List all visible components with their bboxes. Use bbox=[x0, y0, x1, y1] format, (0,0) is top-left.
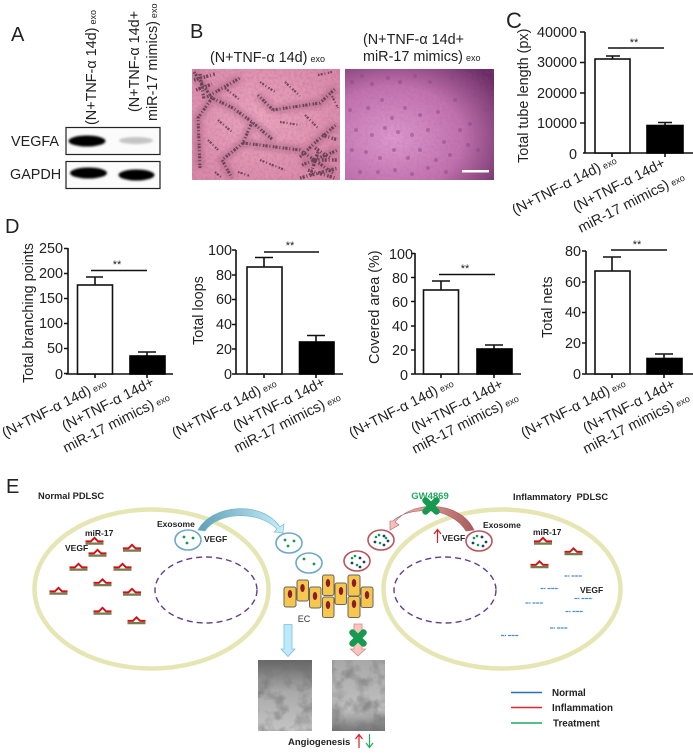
y axis bbox=[537, 25, 693, 163]
legend: Treatment bbox=[553, 718, 601, 730]
chart: total loops: miR-17 mimics)exo bbox=[232, 389, 343, 457]
normal PDLSC title: Normal PDLSC bbox=[38, 491, 104, 501]
schematic labels: VEGF bbox=[580, 585, 603, 595]
schematic labels bbox=[65, 519, 603, 595]
x labels: (N+TNF-α 14d+ bbox=[571, 155, 668, 216]
chart: total loops bbox=[170, 240, 343, 457]
chart: total nets: miR-17 mimics)exo bbox=[581, 390, 692, 458]
chart: covered area: 40 bbox=[392, 319, 408, 335]
red up arrow, angiogenesis bbox=[356, 734, 362, 748]
chart: total nets: 20 bbox=[565, 336, 581, 352]
angiogenesis micrograph left bbox=[258, 660, 312, 731]
legend bbox=[511, 688, 613, 730]
image title 2 bbox=[363, 32, 480, 65]
chart: total loops: 20 bbox=[216, 342, 232, 358]
chart: total nets: (N+TNF-α 14d)exo bbox=[519, 375, 628, 442]
chart: total branching points: Total branching points bbox=[21, 243, 37, 383]
schematic labels: Exosome bbox=[157, 519, 195, 529]
chart: covered area: (N+TNF-α 14d+ bbox=[409, 376, 506, 437]
chart: total nets: (N+TNF-α 14d+ bbox=[581, 376, 678, 437]
y axis: 20000 bbox=[537, 86, 577, 102]
chart: covered area: 60 bbox=[392, 295, 408, 311]
panel letter A: A bbox=[11, 24, 25, 46]
image title 2: miR-17 mimics) exo bbox=[363, 49, 480, 65]
chart: total nets: Total nets bbox=[540, 276, 556, 338]
chart: total loops: Total loops bbox=[191, 276, 207, 345]
schematic labels: miR-17 bbox=[533, 527, 562, 537]
angiogenesis label: Angiogenesis bbox=[288, 737, 350, 748]
legend: Normal bbox=[552, 688, 586, 699]
blue down arrow bbox=[281, 624, 295, 656]
chart: total branching points: 50 bbox=[47, 341, 63, 357]
panel letter D: D bbox=[5, 216, 19, 238]
chart: covered area: Covered area (%) bbox=[367, 250, 383, 364]
normal cell bbox=[34, 510, 268, 668]
miR-17 VEGF markers, normal cell bbox=[50, 538, 146, 623]
blue exosome arrow bbox=[198, 509, 284, 533]
schematic labels: VEGF bbox=[204, 534, 227, 544]
significance marker bbox=[608, 37, 664, 49]
red down arrow bbox=[350, 624, 366, 656]
chart: covered area bbox=[347, 247, 521, 458]
chart: total branching points: miR-17 mimics)exo bbox=[61, 389, 172, 457]
micrograph with sparse cells and scale bar bbox=[345, 69, 494, 180]
bars bbox=[595, 56, 683, 153]
VEGF markers, inflammatory cell bbox=[501, 576, 592, 636]
chart: total nets: 80 bbox=[565, 244, 581, 260]
inflammatory cell bbox=[384, 510, 620, 668]
x labels: miR-17 mimics)exo bbox=[576, 169, 687, 237]
schematic labels: Exosome bbox=[483, 520, 521, 530]
inflammatory PDLSC title: Inflammatory PDLSC bbox=[513, 492, 608, 502]
chart: total branching points: 150 bbox=[39, 291, 63, 307]
chart: total nets bbox=[519, 239, 693, 458]
x labels bbox=[510, 152, 687, 237]
chart: total nets: ** bbox=[633, 239, 642, 251]
GAPDH blot bbox=[66, 162, 160, 188]
chart: total branching points: 0 bbox=[55, 367, 63, 383]
schematic labels: VEGF bbox=[65, 543, 88, 553]
chart: total loops: 100 bbox=[208, 243, 232, 259]
panel A: western blot bbox=[10, 4, 161, 188]
chart: total nets: 0 bbox=[573, 367, 581, 383]
x labels: (N+TNF-α 14d)exo bbox=[510, 152, 619, 219]
chart: total loops: 0 bbox=[224, 367, 232, 383]
image title 1: (N+TNF-α 14d) exo bbox=[210, 50, 325, 66]
legend: Inflammation bbox=[552, 703, 613, 714]
chart: total loops: (N+TNF-α 14d+ bbox=[231, 374, 328, 435]
VEGFA blot bbox=[66, 128, 160, 154]
lane label 2: (N+TNF-α 14d+ bbox=[127, 11, 143, 112]
chart: covered area: 20 bbox=[392, 343, 408, 359]
schematic labels: miR-17 bbox=[85, 528, 114, 538]
chart: total branching points: ** bbox=[113, 259, 122, 271]
y axis: 0 bbox=[569, 147, 577, 163]
chart: covered area: miR-17 mimics)exo bbox=[410, 390, 521, 458]
panel E: schematic bbox=[6, 476, 620, 748]
panel B: microscopy bbox=[190, 21, 494, 180]
lane label 2 bbox=[127, 4, 161, 121]
chart: total loops: (N+TNF-α 14d)exo bbox=[170, 375, 279, 442]
chart: total loops: ** bbox=[286, 240, 295, 252]
panel letter B: B bbox=[190, 21, 203, 43]
miR-17 markers, inflammatory cell bbox=[530, 538, 582, 567]
significance marker: ** bbox=[630, 37, 639, 49]
lane label 1: (N+TNF-α 14d)exo bbox=[84, 10, 100, 125]
row label GAPDH: GAPDH bbox=[10, 167, 61, 183]
y axis title: Total tube length (px) bbox=[516, 29, 532, 163]
endothelial cells bbox=[284, 575, 373, 618]
chart: total branching points: (N+TNF-α 14d)exo bbox=[0, 375, 109, 442]
chart: total branching points: (N+TNF-α 14d+ bbox=[60, 374, 157, 435]
angiogenesis micrograph right bbox=[332, 660, 385, 731]
chart: total nets: 60 bbox=[565, 275, 581, 291]
lane label 2: miR-17 mimics)exo bbox=[145, 4, 161, 121]
green block cross top bbox=[426, 500, 436, 512]
panel C: total tube length chart bbox=[506, 8, 693, 237]
chart: covered area: 100 bbox=[389, 247, 413, 263]
panel letter E: E bbox=[6, 476, 19, 498]
panel letter C: C bbox=[506, 8, 522, 33]
micrograph with tube network bbox=[192, 69, 340, 180]
chart: total branching points: 200 bbox=[39, 266, 63, 282]
image title 2: (N+TNF-α 14d+ bbox=[363, 32, 464, 48]
schematic labels: VEGF bbox=[442, 533, 465, 543]
red up arrow, VEGF bbox=[434, 530, 441, 543]
y axis: 30000 bbox=[537, 55, 577, 71]
panel D: quantification charts bbox=[0, 216, 693, 458]
chart: total branching points bbox=[0, 241, 173, 457]
exosomes normal bbox=[175, 530, 322, 573]
chart: covered area: 0 bbox=[400, 368, 408, 384]
chart: total loops: 60 bbox=[216, 292, 232, 308]
exosomes inflammatory bbox=[344, 530, 492, 571]
chart: covered area: (N+TNF-α 14d)exo bbox=[347, 375, 456, 442]
chart: covered area: ** bbox=[461, 263, 470, 275]
GW4869 label: GW4869 bbox=[411, 491, 449, 502]
chart: covered area: 80 bbox=[392, 271, 408, 287]
chart: total branching points: 250 bbox=[39, 241, 63, 257]
chart: total branching points: 100 bbox=[39, 316, 63, 332]
red exosome arrow bbox=[390, 506, 474, 531]
chart: total nets: 40 bbox=[565, 305, 581, 321]
green block cross lower bbox=[352, 632, 364, 644]
y axis: 10000 bbox=[537, 116, 577, 132]
y axis: 40000 bbox=[537, 25, 577, 41]
chart: total loops: 80 bbox=[216, 268, 232, 284]
green down arrow, angiogenesis bbox=[366, 734, 373, 748]
row label VEGFA: VEGFA bbox=[11, 134, 59, 150]
EC label: EC bbox=[298, 614, 311, 624]
chart: total loops: 40 bbox=[216, 317, 232, 333]
